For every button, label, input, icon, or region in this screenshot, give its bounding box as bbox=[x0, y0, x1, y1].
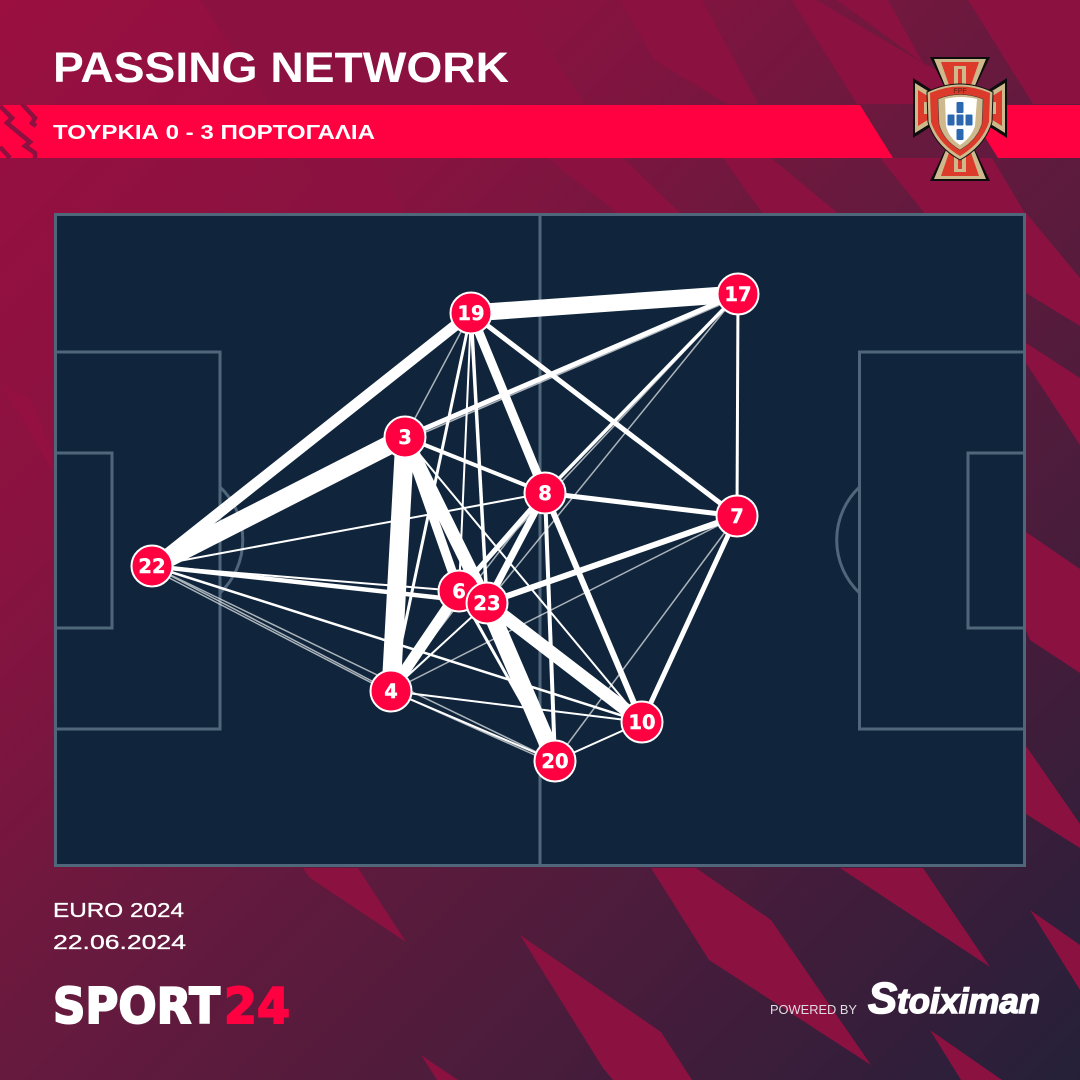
left penalty arc bbox=[220, 487, 243, 593]
right penalty arc bbox=[837, 487, 860, 593]
player 17: 17 bbox=[724, 283, 752, 306]
player 23 bbox=[466, 582, 508, 624]
player 19 bbox=[450, 292, 492, 334]
pitch bbox=[56, 214, 1024, 866]
player 10: 10 bbox=[628, 711, 656, 734]
player 17 bbox=[718, 274, 758, 314]
passing network edges bbox=[152, 294, 738, 764]
crest: Portuguese Football Federation bbox=[913, 57, 1007, 181]
player 20 bbox=[534, 740, 576, 782]
player 4: 4 bbox=[384, 680, 398, 703]
player 3: 3 bbox=[398, 426, 412, 449]
powered by label: POWERED BY bbox=[770, 1003, 858, 1017]
player 19: 19 bbox=[457, 302, 485, 325]
match subtitle: ΤΟΥΡΚΙΑ 0 - 3 ΠΟΡΤΟΓΑΛΙΑ bbox=[53, 122, 375, 144]
crest: Portuguese Football Federation: FPF bbox=[953, 88, 967, 95]
right penalty box bbox=[860, 352, 1024, 729]
banner lightning mark bbox=[0, 104, 36, 158]
competition label: EURO 2024 bbox=[53, 899, 184, 922]
Sport24 logo: SPORT bbox=[53, 978, 221, 1035]
title: PASSING NETWORK bbox=[53, 44, 509, 92]
player 22: 22 bbox=[138, 555, 166, 578]
player nodes bbox=[132, 274, 758, 782]
left penalty box bbox=[56, 352, 220, 729]
player 20: 20 bbox=[541, 750, 569, 773]
player 6 bbox=[438, 570, 480, 612]
player 4 bbox=[370, 670, 412, 712]
Stoiximan logo: Stoiximan bbox=[868, 974, 1040, 1023]
player 7 bbox=[716, 496, 758, 536]
right goal box bbox=[968, 453, 1024, 628]
player 22 bbox=[132, 546, 172, 586]
player 3 bbox=[384, 416, 426, 458]
Sport24 logo: 24 bbox=[224, 978, 290, 1035]
player 23: 23 bbox=[473, 592, 501, 615]
player 7: 7 bbox=[730, 505, 744, 528]
player 8: 8 bbox=[538, 482, 552, 505]
match date: 22.06.2024 bbox=[53, 931, 186, 954]
player 10 bbox=[622, 702, 662, 742]
player 6: 6 bbox=[452, 580, 466, 603]
left goal box bbox=[56, 453, 112, 628]
player 8 bbox=[524, 472, 566, 514]
red banner bbox=[0, 104, 1080, 158]
